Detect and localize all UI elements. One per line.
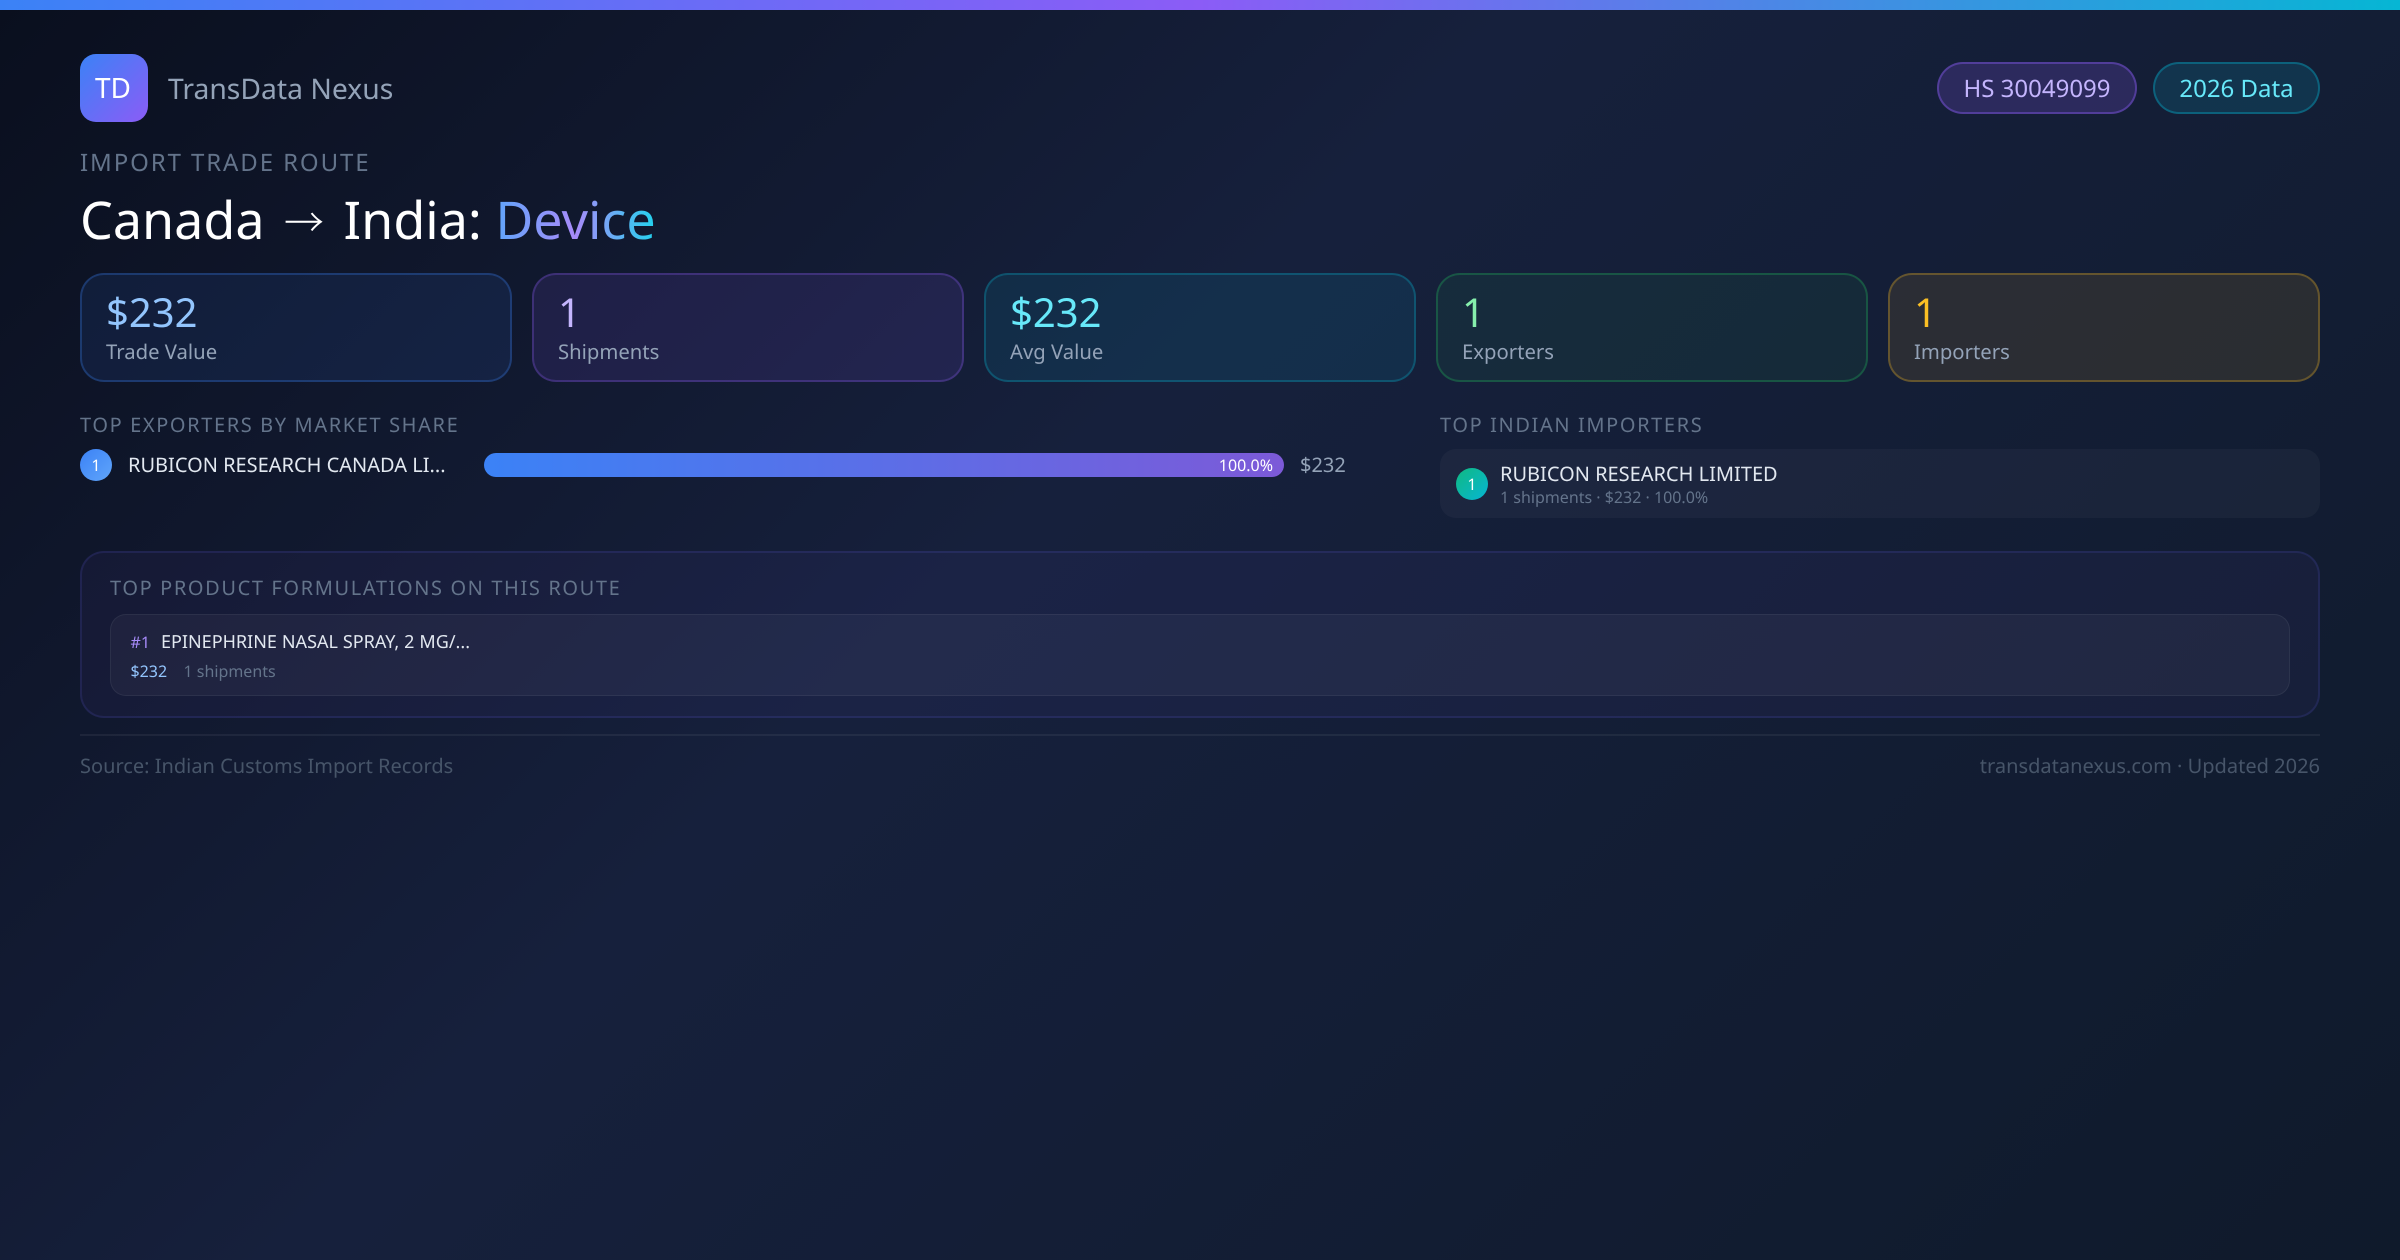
site and update note: transdatanexus.com · Updated 2026 [1980, 752, 2320, 778]
stat label: Trade Value [106, 337, 217, 365]
stat card: importers [1888, 273, 2320, 382]
badge: HS code [1937, 62, 2137, 114]
badge: HS code: HS 30049099 [1963, 72, 2111, 105]
stat label: Importers [1914, 337, 2010, 365]
panel: top exporters [80, 411, 1346, 481]
importer details: 1 shipments · $232 · 100.0% [1500, 486, 1708, 508]
brand name: TransData Nexus [168, 70, 393, 108]
icon: TD logo: TD [95, 69, 131, 107]
top gradient bar [0, 0, 2400, 10]
importer row [1440, 449, 2320, 518]
product rank: #1 [130, 630, 150, 652]
badge: data year [2153, 62, 2320, 114]
brand header [80, 54, 393, 122]
rank badge: 1 [91, 454, 101, 476]
product row [110, 614, 2290, 696]
exporter name: RUBICON RESEARCH CANADA LI... [128, 451, 446, 478]
stat card: trade value [80, 273, 512, 382]
stat card: exporters [1436, 273, 1868, 382]
section heading: TOP PRODUCT FORMULATIONS ON THIS ROUTE [110, 574, 621, 601]
market share bar: 100.0% [1219, 454, 1273, 476]
product shipments: 1 shipments [184, 660, 276, 682]
stat value: 1 [1462, 284, 1485, 339]
stat card: average value [984, 273, 1416, 382]
stat value: $232 [106, 284, 198, 339]
rank badge [80, 449, 112, 481]
title: Canada → India: Device [80, 184, 656, 254]
exporter value: $232 [1300, 451, 1346, 478]
rank badge: 1 [1467, 473, 1477, 495]
rank badge [1456, 468, 1488, 500]
section heading: TOP EXPORTERS BY MARKET SHARE [80, 411, 459, 438]
badge: data year: 2026 Data [2179, 72, 2294, 105]
section heading: TOP INDIAN IMPORTERS [1440, 411, 1703, 438]
product name: EPINEPHRINE NASAL SPRAY, 2 MG/... [161, 630, 470, 654]
source note: Source: Indian Customs Import Records [80, 752, 453, 778]
panel: top importers [1440, 411, 1778, 508]
stat label: Avg Value [1010, 337, 1103, 365]
stat card: shipments [532, 273, 964, 382]
product value: $232 [130, 660, 167, 682]
stat value: 1 [1914, 284, 1937, 339]
stat value: 1 [558, 284, 581, 339]
importer name: RUBICON RESEARCH LIMITED [1500, 460, 1778, 486]
market share bar [484, 453, 1284, 477]
panel: top product formulations [80, 551, 2320, 718]
footer [80, 734, 2320, 794]
stat label: Exporters [1462, 337, 1554, 365]
icon: TD logo [80, 54, 148, 122]
stat label: Shipments [558, 337, 659, 365]
eyebrow label: IMPORT TRADE ROUTE [80, 146, 370, 179]
stat value: $232 [1010, 284, 1102, 339]
